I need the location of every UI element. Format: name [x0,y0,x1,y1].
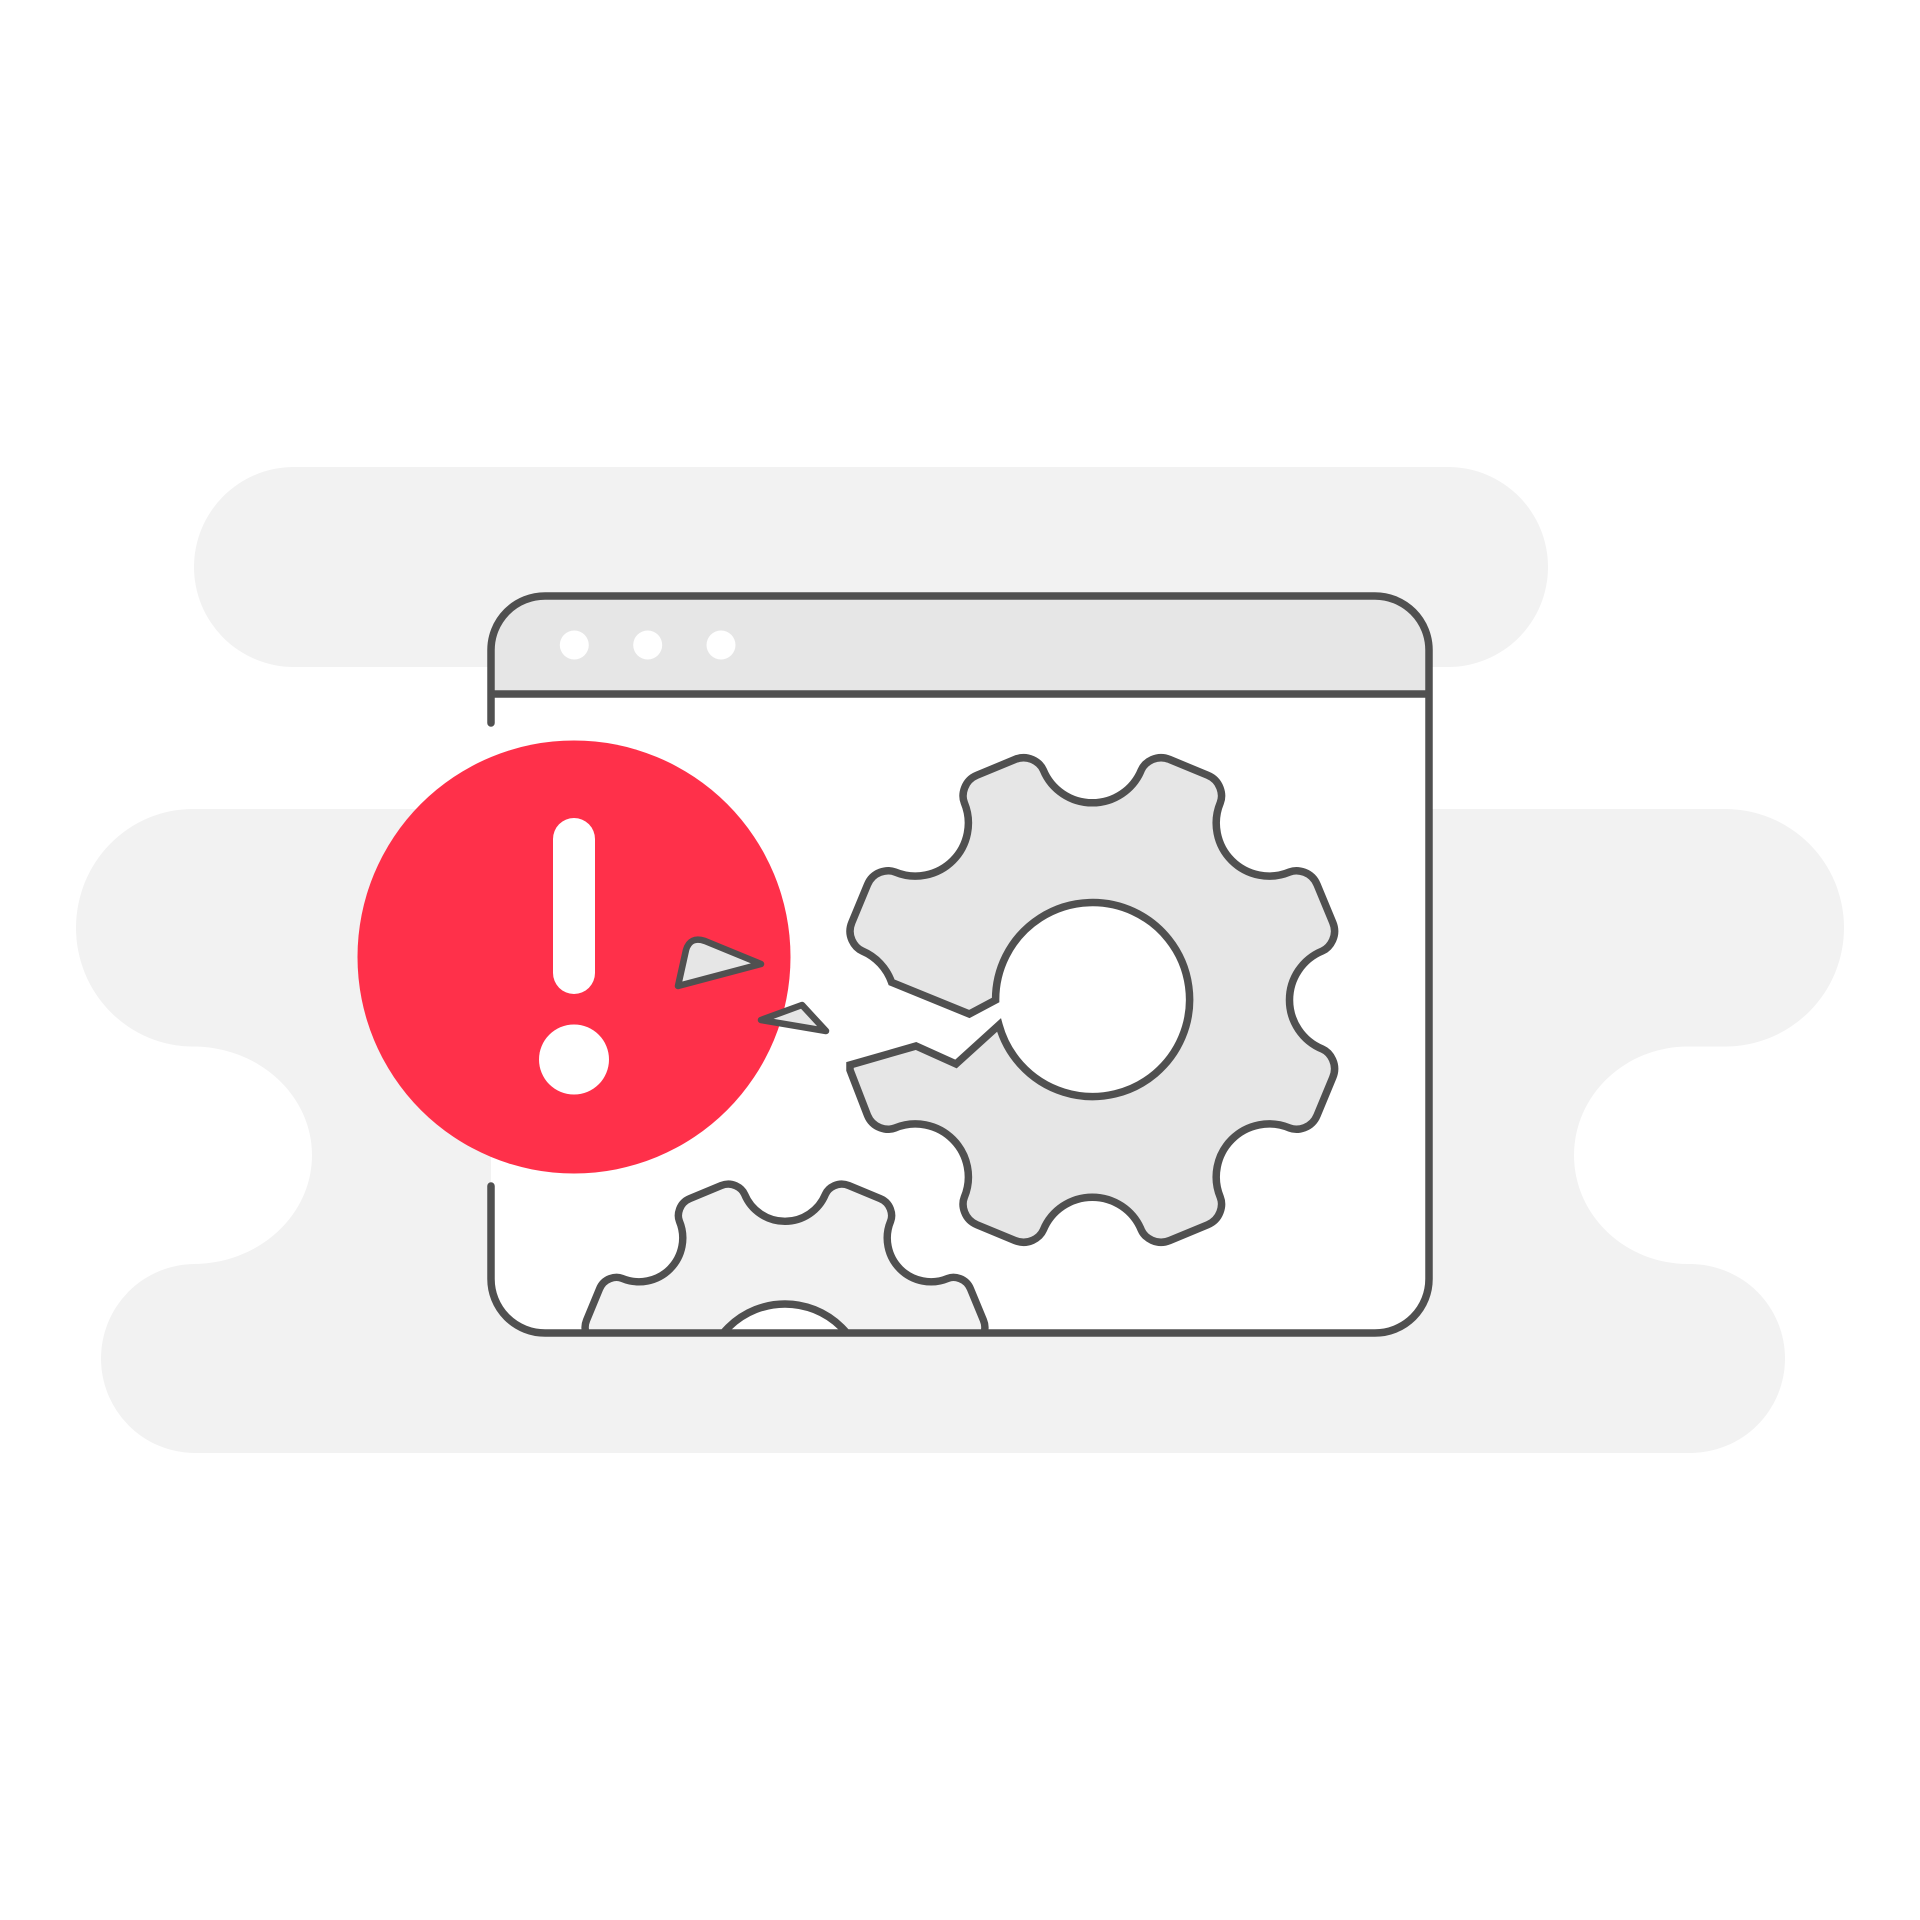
small gear, cropped by window [581,1180,989,1330]
browser window: white body [491,694,1429,1333]
exclamation mark: bar [553,818,595,994]
red alert circle [358,740,790,1174]
illustration: system error [76,467,1844,1453]
browser window: outline [491,596,1429,1333]
background blob: lower cloud [76,809,1844,1453]
gear shard: small [761,1005,826,1031]
large broken gear [850,758,1335,1242]
exclamation mark: dot [539,1024,609,1094]
browser window: header dots [560,630,736,660]
gear shard: large [678,940,761,986]
browser window: header divider [491,690,1429,698]
background blob: top pill [194,467,1548,667]
browser window: header bar [491,596,1429,694]
